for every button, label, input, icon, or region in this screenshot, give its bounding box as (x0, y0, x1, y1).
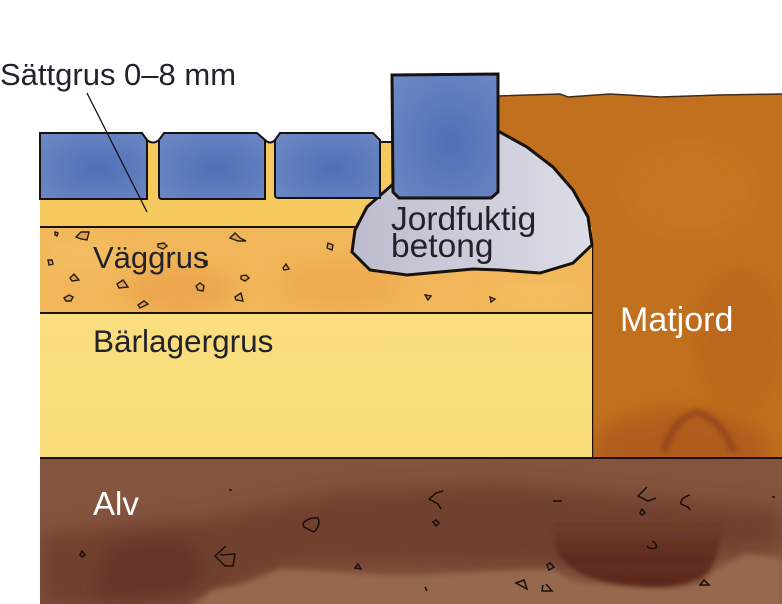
upright kerb stone (392, 74, 498, 198)
label: Bärlagergrus: Bärlagergrus (93, 323, 273, 359)
label: Väggrus: Väggrus (93, 240, 208, 275)
label: Sättgrus 0–8 mm: Sättgrus 0–8 mm (0, 57, 236, 92)
panel: väggrus layer (40, 227, 592, 313)
label: Alv: Alv (93, 485, 139, 522)
label: Jordfuktig betong: Jordfuktig (391, 201, 536, 238)
panel: sättgrus layer (40, 142, 394, 227)
panel: bärlagergrus layer (40, 314, 592, 458)
concrete haunch (352, 131, 592, 275)
panel: matjord soil layer (498, 94, 782, 490)
stone 3 (275, 133, 380, 198)
stone 1 (40, 133, 147, 199)
paving stones (40, 133, 392, 199)
label: Jordfuktig betong: betong (391, 228, 493, 265)
leader line (87, 93, 147, 212)
label: Matjord: Matjord (620, 301, 733, 339)
label: Jordfuktig betong (391, 201, 536, 265)
panel: alv subsoil layer (40, 458, 782, 604)
stone 2 (159, 133, 265, 199)
